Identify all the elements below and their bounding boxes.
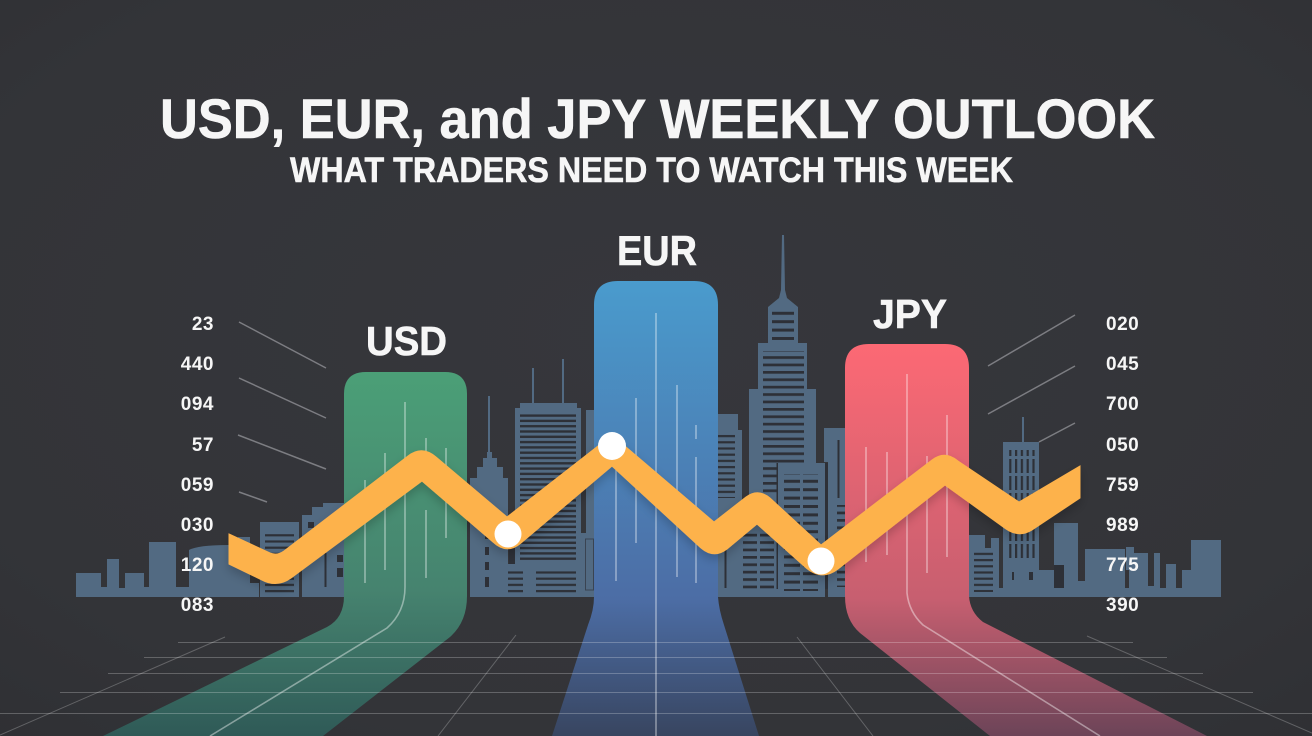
label: JPY: JPY — [873, 291, 947, 337]
central-right skyscraper — [718, 235, 845, 597]
label: USD: USD — [366, 318, 447, 364]
trend markers — [494, 432, 834, 574]
perspective grid — [0, 635, 1312, 736]
right axis numbers — [1106, 314, 1139, 616]
left axis numbers: 440 — [181, 354, 214, 375]
orange trend line — [229, 440, 1080, 584]
right axis numbers: 775 — [1106, 555, 1139, 576]
side tick lines — [238, 315, 1075, 502]
skyline — [76, 235, 1221, 597]
right axis numbers: 390 — [1106, 595, 1139, 616]
left stepped building — [302, 503, 344, 597]
central-left office tower — [508, 359, 594, 597]
bar inner lines: USD — [210, 402, 446, 736]
far left skyline blocks — [76, 537, 259, 597]
right axis numbers: 759 — [1106, 475, 1139, 496]
left office with stripes — [260, 522, 299, 597]
bar: JPY red — [845, 344, 1207, 736]
subtitle: WHAT TRADERS NEED TO WATCH THIS WEEK — [290, 151, 1013, 190]
right axis numbers: 700 — [1106, 394, 1139, 415]
left axis numbers: 083 — [181, 595, 214, 616]
left axis numbers — [181, 314, 214, 616]
bar inner lines: EUR — [616, 313, 696, 736]
far right skyline — [1039, 523, 1221, 597]
left axis numbers: 059 — [181, 475, 214, 496]
left axis numbers: 030 — [181, 515, 214, 536]
right windowed tower — [1003, 417, 1039, 597]
left tower with spire — [470, 396, 508, 597]
right axis numbers: 989 — [1106, 515, 1139, 536]
title: USD, EUR, and JPY WEEKLY OUTLOOK — [160, 87, 1155, 150]
bar inner lines: JPY — [866, 374, 1100, 736]
left axis numbers: 120 — [181, 555, 214, 576]
left axis numbers: 23 — [192, 314, 214, 335]
right axis numbers: 045 — [1106, 354, 1139, 375]
label: EUR: EUR — [617, 227, 697, 274]
bar: EUR blue — [552, 281, 759, 736]
left axis numbers: 57 — [192, 435, 214, 456]
right axis numbers: 020 — [1106, 314, 1139, 335]
left axis numbers: 094 — [181, 394, 214, 415]
right skyline low block — [969, 535, 1003, 597]
bar: USD green — [103, 372, 467, 736]
right axis numbers: 050 — [1106, 435, 1139, 456]
